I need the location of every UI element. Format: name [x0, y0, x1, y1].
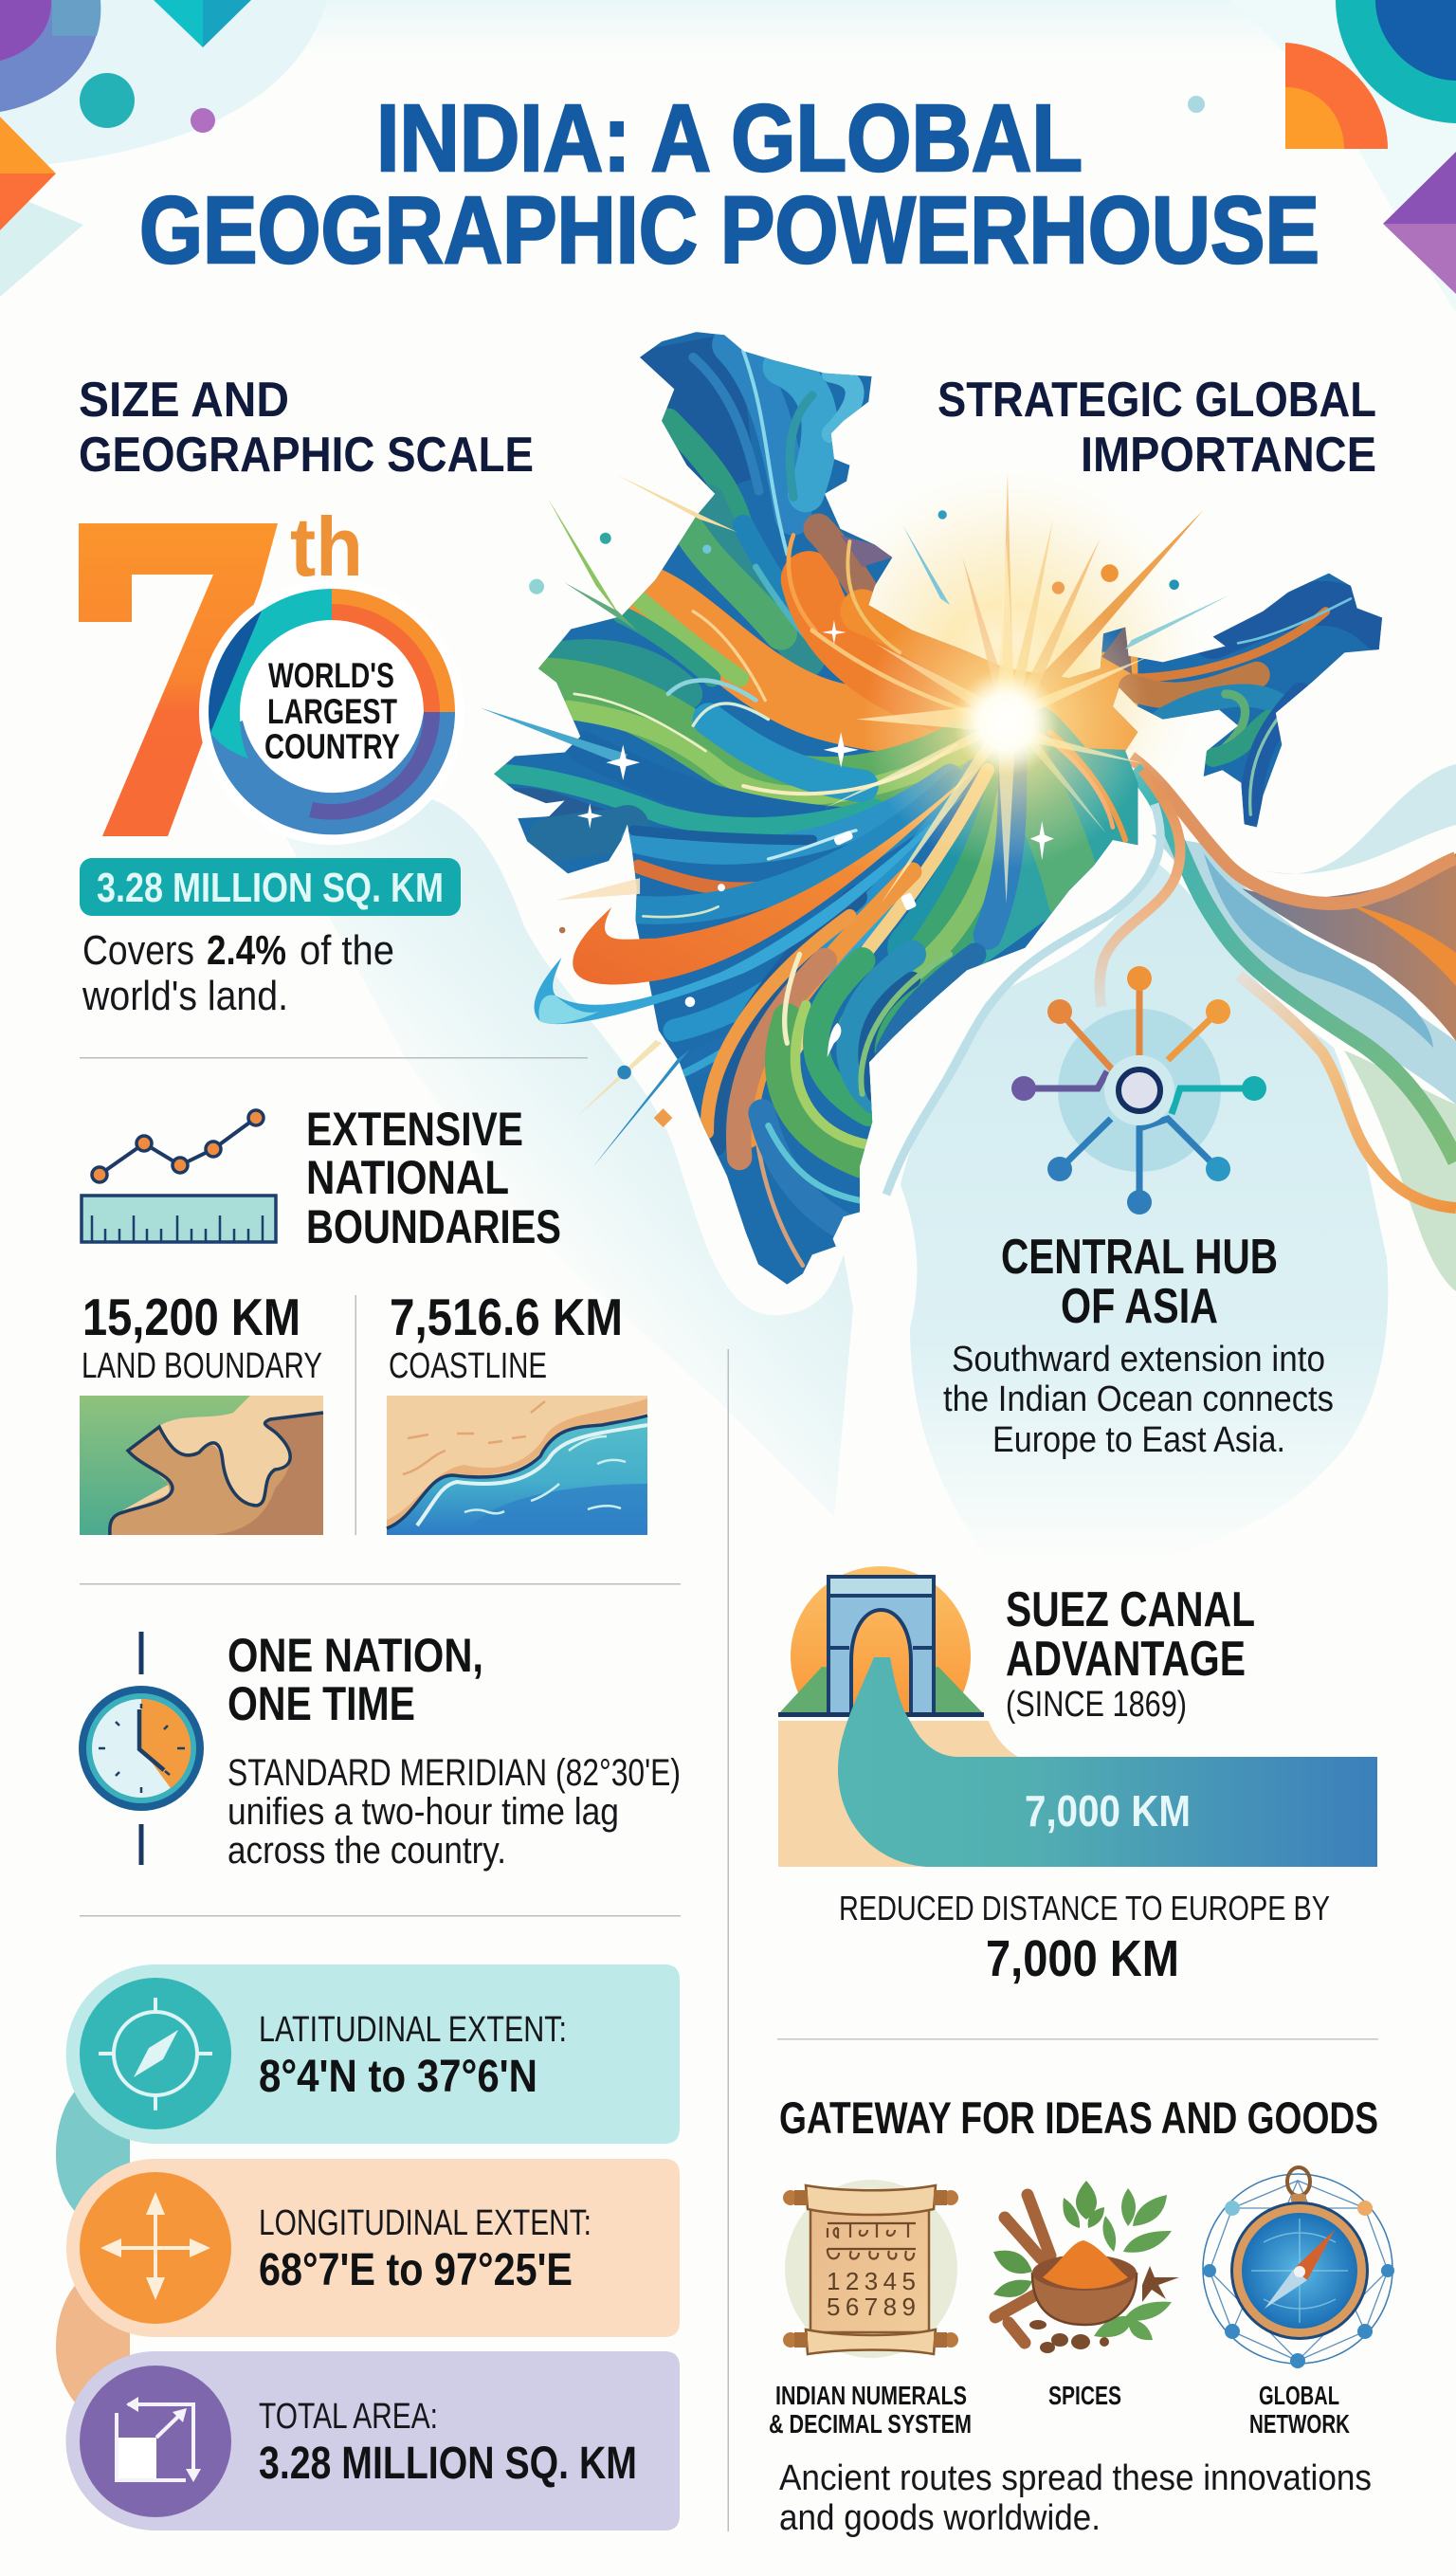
icon: coastline map: [387, 1396, 647, 1535]
central hub text: CENTRAL HUB: [1001, 1230, 1278, 1285]
background washes: [0, 0, 1456, 1555]
card: longitude: LONGITUDINAL EXTENT:: [259, 2203, 592, 2243]
heading: strategic global importance: IMPORTANCE: [1081, 428, 1376, 483]
icon: line chart and ruler: [82, 1110, 276, 1242]
icon labels: SPICES: [1048, 2381, 1121, 2410]
icon: spices: [993, 2181, 1179, 2353]
body text: unifies a two-hour time lag: [228, 1791, 619, 1833]
panel: extensive national boundaries: [80, 1103, 647, 1535]
north: Kashmir swirls: [499, 332, 1382, 1266]
icon labels: GLOBAL: [1259, 2381, 1339, 2410]
panel: suez canal advantage: [778, 1566, 1377, 1987]
heading: size and geographic scale: GEOGRAPHIC SCALE: [79, 428, 534, 483]
note: and goods worldwide.: [779, 2498, 1101, 2538]
sparkles: [577, 620, 1054, 1057]
body text: [228, 1752, 681, 1872]
connector arcs: [56, 2067, 130, 2422]
icon labels: [769, 2381, 1350, 2439]
donut label: WORLD'S: [268, 656, 394, 695]
stat: land boundary: LAND BOUNDARY: [82, 1346, 322, 1386]
centre to south bands: [674, 770, 975, 1031]
panel: one nation one time: [79, 1629, 681, 1872]
sun glow behind map: [806, 466, 1207, 871]
heading: NATIONAL: [306, 1151, 509, 1204]
illustration: canal and gate: [778, 1566, 1377, 1867]
distance note: [839, 1889, 1330, 1987]
heading: size and geographic scale: SIZE AND: [79, 373, 289, 428]
heading: ONE NATION,: [228, 1629, 483, 1682]
heading: [228, 1629, 483, 1730]
donut label: [264, 656, 400, 766]
area badge: 3.28 MILLION SQ. KM: [97, 865, 444, 911]
heading: strategic global importance: STRATEGIC GLOBAL: [937, 373, 1376, 428]
donut label: COUNTRY: [264, 727, 400, 766]
heading: BOUNDARIES: [306, 1200, 561, 1253]
th suffix: th: [290, 500, 363, 594]
icon: land boundary map: [80, 1396, 323, 1535]
icon: four-way arrows: [80, 2172, 231, 2324]
decorative corner shapes: top right: [1188, 0, 1456, 294]
icon: compass: [80, 1978, 231, 2129]
stat: coastline: COASTLINE: [389, 1346, 547, 1386]
big orange crescent: [573, 764, 981, 984]
body text: STANDARD MERIDIAN (82°30'E): [228, 1752, 681, 1794]
card: latitude: LATITUDINAL EXTENT:: [259, 2010, 567, 2050]
central hub text: Southward extension into: [952, 1340, 1325, 1379]
card: total area: 3.28 MILLION SQ. KM: [259, 2439, 637, 2489]
map of India with radiant swirls: [474, 313, 1413, 1304]
orange heart: [646, 595, 975, 725]
card: latitude: [66, 1964, 680, 2144]
sunburst rays: [481, 471, 1228, 1167]
central hub text: OF ASIA: [1061, 1279, 1218, 1334]
note: [779, 2458, 1372, 2538]
dots around map: [529, 510, 1179, 1127]
icon: clock: [79, 1632, 204, 1865]
heading: (SINCE 1869): [1006, 1685, 1187, 1725]
card: longitude: 68°7'E to 97°25'E: [259, 2245, 573, 2295]
heading: size and geographic scale: [79, 373, 534, 483]
land share note: world's land.: [82, 973, 288, 1019]
India silhouette: [474, 313, 1413, 1304]
icon: area square: [80, 2366, 231, 2517]
body text: across the country.: [228, 1830, 506, 1872]
green and teal shoulders: [707, 503, 806, 659]
donut label: LARGEST: [267, 692, 397, 731]
panel: extent cards: [56, 1964, 680, 2530]
east fills near the sun: [912, 630, 1138, 758]
heading: [306, 1103, 561, 1253]
icon: numeral scroll: [783, 2180, 958, 2358]
card: longitude: [66, 2159, 680, 2337]
donut ring: [199, 579, 464, 845]
card: total area: TOTAL AREA:: [259, 2397, 438, 2437]
north east states: [1213, 603, 1382, 637]
icon: global network compass: [1203, 2167, 1394, 2368]
panel: gateway for ideas and goods: [769, 2092, 1394, 2538]
note: Ancient routes spread these innovations: [779, 2458, 1372, 2498]
title: INDIA: A GLOBAL: [376, 85, 1083, 192]
icon: numeral scroll: 12345: [827, 2267, 916, 2295]
heading: [1006, 1582, 1255, 1725]
stat: land boundary: 15,200 KM: [82, 1288, 300, 1346]
icon labels: & DECIMAL SYSTEM: [769, 2409, 972, 2439]
central hub text: [943, 1230, 1334, 1460]
stat: land boundary: [82, 1288, 322, 1386]
west: deep blue and teal: [584, 748, 849, 824]
flowing ribbons from India to the right edge: [886, 758, 1456, 1208]
icon labels: INDIAN NUMERALS: [775, 2381, 967, 2410]
central hub text: Europe to East Asia.: [992, 1420, 1285, 1460]
distance note: REDUCED DISTANCE TO EUROPE BY: [839, 1889, 1330, 1927]
heading: SUEZ CANAL: [1006, 1582, 1255, 1637]
heading: ONE TIME: [228, 1677, 415, 1730]
numeral seven: [79, 523, 278, 836]
distance note: 7,000 KM: [986, 1930, 1179, 1987]
heading: ADVANTAGE: [1006, 1632, 1246, 1687]
central hub text: the Indian Ocean connects: [943, 1379, 1334, 1419]
stat: coastline: 7,516.6 KM: [390, 1288, 623, 1346]
title: [139, 85, 1320, 283]
icon: central hub network: [1011, 966, 1266, 1215]
west: greens and blue pool: [549, 655, 687, 694]
decorative corner shapes: top left: [0, 0, 251, 230]
area badge: [80, 858, 461, 916]
land share note: Covers: [82, 927, 194, 974]
card: total area: [65, 2351, 680, 2530]
heading: strategic global importance: [937, 373, 1376, 483]
card: latitude: 8°4'N to 37°6'N: [259, 2052, 537, 2102]
bar label: 7,000 KM: [1025, 1786, 1191, 1836]
land share note: of the: [300, 927, 394, 974]
panel: 7th largest: [79, 500, 464, 1019]
icon labels: NETWORK: [1249, 2409, 1350, 2439]
land share note: 2.4%: [207, 927, 286, 974]
land share note: [82, 927, 394, 1019]
icon: numeral scroll: 56789: [827, 2293, 916, 2321]
stat: coastline: [389, 1288, 623, 1386]
heading: EXTENSIVE: [306, 1103, 523, 1156]
